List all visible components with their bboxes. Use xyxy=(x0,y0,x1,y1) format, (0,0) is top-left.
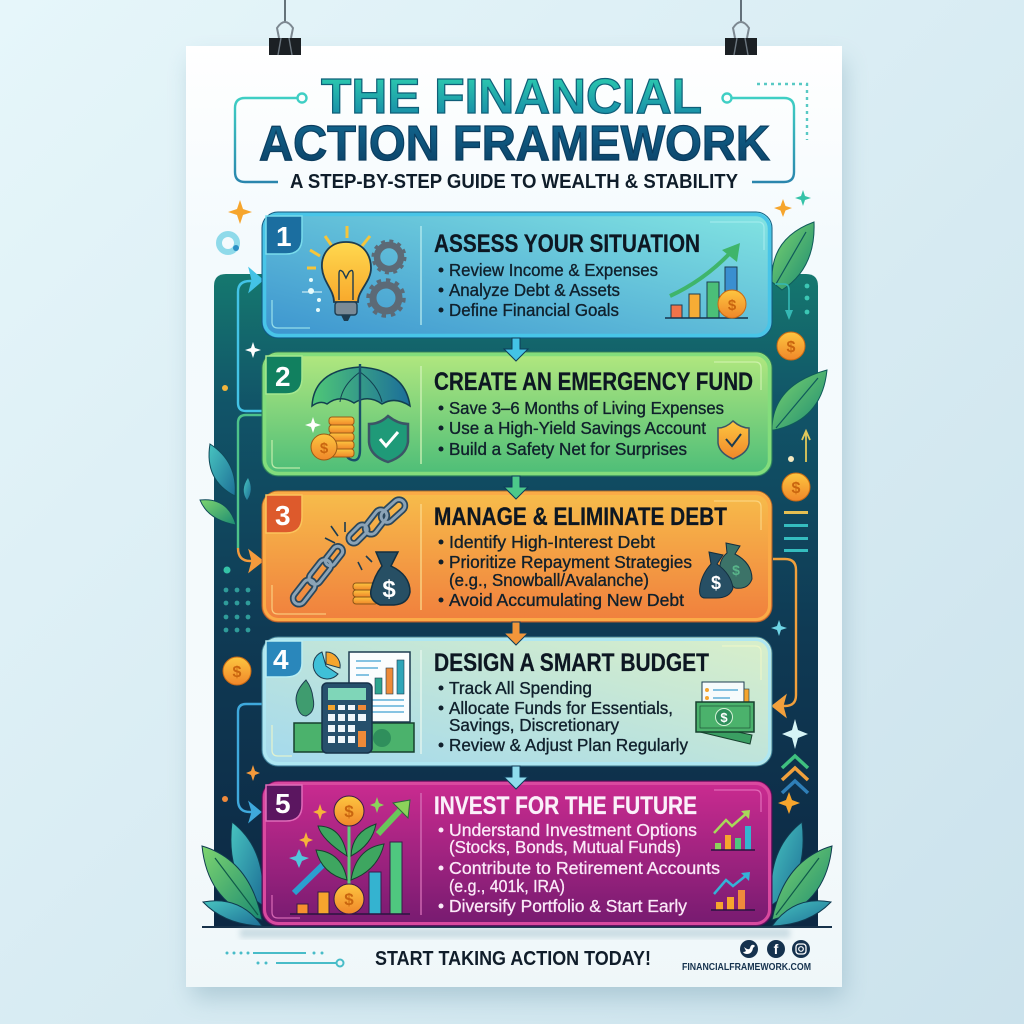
number badge 1: 1 xyxy=(276,221,292,252)
icon: lightbulb and gears xyxy=(302,226,405,321)
card 4 background xyxy=(262,637,772,766)
leaf right middle xyxy=(772,370,827,430)
icon: money plant and bars xyxy=(289,796,410,914)
heading: ASSESS YOUR SITUATION xyxy=(434,230,700,258)
side coin right middle xyxy=(782,473,810,501)
bullet list xyxy=(438,260,658,320)
bullet list xyxy=(438,532,692,610)
binder clip left xyxy=(269,0,301,55)
bullet list xyxy=(438,820,720,916)
social icons xyxy=(740,940,810,958)
divider xyxy=(420,650,422,754)
title xyxy=(259,70,770,171)
side decorations xyxy=(222,284,810,814)
call to action: START TAKING ACTION TODAY! xyxy=(375,947,651,970)
leaves bottom right xyxy=(771,822,832,926)
connector arrow: step 3 down to step 4 xyxy=(772,559,796,717)
sparkles and ring top xyxy=(219,190,811,252)
side coin right middle: $ xyxy=(792,480,801,497)
heading: MANAGE & ELIMINATE DEBT xyxy=(434,503,727,531)
connector arrow: step 2 down to step 3 xyxy=(238,415,263,572)
icon: money plant and bars: $ xyxy=(344,890,354,909)
number badge 1 xyxy=(266,216,302,254)
icon: money bags: $ xyxy=(711,573,721,593)
icon: money bags xyxy=(700,543,752,598)
website: FINANCIALFRAMEWORK.COM xyxy=(682,962,811,973)
leaf top right xyxy=(772,222,814,290)
panel: step 2 emergency fund xyxy=(262,352,772,476)
panel: step 3 debt xyxy=(262,491,772,622)
bullet list: Use a High-Yield Savings Account xyxy=(449,418,706,438)
footer panel shadow xyxy=(240,928,790,938)
number badge 3 xyxy=(266,495,302,533)
icon: mini chart lower xyxy=(711,872,755,910)
card 3 background xyxy=(262,491,772,622)
inner corner accents xyxy=(272,222,764,328)
panel: step 5 invest xyxy=(262,781,772,926)
bullet list: Define Financial Goals xyxy=(449,300,619,320)
icon: umbrella coins shield: $ xyxy=(320,440,329,457)
leaves bottom left xyxy=(202,822,263,926)
number badge 5: 5 xyxy=(275,788,291,819)
step connector arrows xyxy=(504,338,528,789)
bullet list: Allocate Funds for Essentials, xyxy=(449,698,673,718)
bullet list: Save 3–6 Months of Living Expenses xyxy=(449,398,724,418)
title frame xyxy=(235,84,807,182)
side coin left: $ xyxy=(233,664,242,681)
icon: gold shield xyxy=(718,421,749,459)
icon: broken chain and money bag xyxy=(291,497,410,607)
card 1 background xyxy=(262,212,772,338)
bullet list xyxy=(438,678,688,755)
card 2 background xyxy=(262,352,772,476)
bullet list xyxy=(438,398,724,459)
bullet list: Review & Adjust Plan Regularly xyxy=(449,735,688,755)
icon: mini chart upper xyxy=(711,810,755,850)
panel: step 1 assess xyxy=(262,212,772,338)
divider xyxy=(420,793,422,915)
icon: broken chain and money bag: $ xyxy=(382,576,396,603)
heading: CREATE AN EMERGENCY FUND xyxy=(434,368,753,396)
connector arrow: step 4 down to step 5 xyxy=(238,704,262,822)
card 5 background xyxy=(262,781,772,926)
title line 1: THE FINANCIAL xyxy=(321,70,702,124)
leaves left middle xyxy=(200,444,251,525)
icon: wallet and cash: $ xyxy=(720,710,728,725)
poster shadow xyxy=(192,60,844,998)
divider xyxy=(420,366,422,464)
side coin top right: $ xyxy=(787,339,796,356)
poster sheet xyxy=(186,46,842,987)
dark backing panel xyxy=(214,274,818,926)
bullet list: Understand Investment Options xyxy=(449,820,697,840)
bullet list: (e.g., 401k, IRA) xyxy=(449,876,565,896)
icon: growth chart with coin xyxy=(665,243,748,318)
bullet list: (Stocks, Bonds, Mutual Funds) xyxy=(449,837,681,857)
heading: DESIGN A SMART BUDGET xyxy=(434,649,709,677)
bullet list: Review Income & Expenses xyxy=(449,260,658,280)
baseline rule xyxy=(202,926,832,928)
inner corner accents xyxy=(272,646,761,756)
icon: money plant and bars: $ xyxy=(344,802,354,821)
bullet list: Track All Spending xyxy=(449,678,592,698)
bullet list: Prioritize Repayment Strategies xyxy=(449,552,692,572)
bullet list: Savings, Discretionary xyxy=(449,715,619,735)
heading: INVEST FOR THE FUTURE xyxy=(434,792,697,820)
inner corner accents xyxy=(272,790,761,918)
bullet list: Identify High-Interest Debt xyxy=(449,532,655,552)
icon: wallet and cash xyxy=(696,682,754,744)
title line 2: ACTION FRAMEWORK xyxy=(259,117,770,171)
number badge 3: 3 xyxy=(275,500,291,531)
social icons: f xyxy=(774,941,779,957)
divider xyxy=(420,504,422,610)
icon: calculator report cash xyxy=(294,652,414,753)
bullet list: Diversify Portfolio & Start Early xyxy=(449,896,687,916)
binder clip right xyxy=(725,0,757,55)
bullet list: (e.g., Snowball/Avalanche) xyxy=(449,570,649,590)
icon: umbrella coins shield xyxy=(305,364,410,462)
bullet list: Contribute to Retirement Accounts xyxy=(449,858,720,878)
number badge 5 xyxy=(266,785,302,821)
inner corner accents xyxy=(272,501,761,614)
number badge 4 xyxy=(266,641,302,677)
subtitle: A STEP-BY-STEP GUIDE TO WEALTH & STABILITY xyxy=(290,170,738,193)
number badge 2 xyxy=(266,356,302,394)
bullet list: Analyze Debt & Assets xyxy=(449,280,620,300)
panel: step 4 budget xyxy=(262,637,772,766)
number badge 4: 4 xyxy=(273,644,289,675)
side coin top right xyxy=(777,332,805,360)
bullet list: Avoid Accumulating New Debt xyxy=(449,590,684,610)
icon: growth chart with coin: $ xyxy=(728,297,737,314)
divider xyxy=(420,226,422,325)
bullet list: Build a Safety Net for Surprises xyxy=(449,439,687,459)
footer decoration line xyxy=(226,952,344,966)
side coin left xyxy=(223,657,251,685)
connector arrow: step 2 up to step 1 xyxy=(238,268,263,411)
icon: money bags: $ xyxy=(732,562,740,578)
number badge 2: 2 xyxy=(275,361,291,392)
inner corner accents xyxy=(272,362,761,468)
